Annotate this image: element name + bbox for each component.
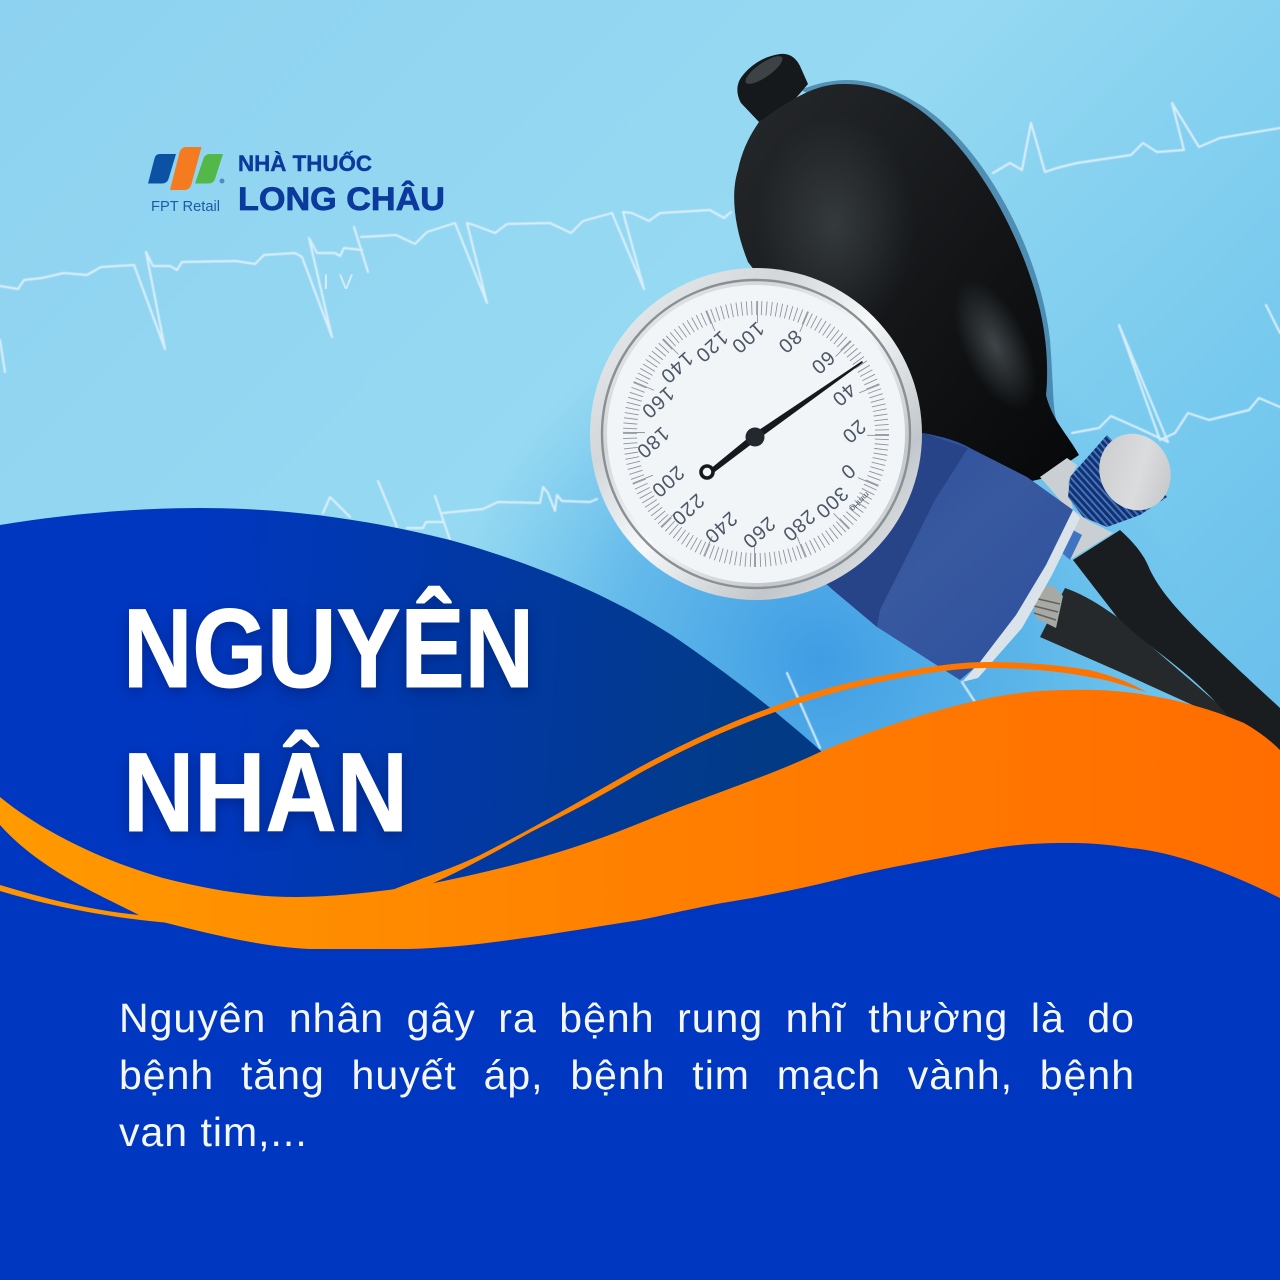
logo mark green bbox=[195, 154, 223, 184]
logo FPT Retail: FPT Retail bbox=[151, 199, 220, 215]
connector shadow side bbox=[800, 433, 968, 627]
bulb cap highlight bbox=[742, 52, 786, 88]
background shade bbox=[300, 240, 1280, 1030]
metal clamp bbox=[1040, 458, 1113, 560]
gauge bbox=[590, 268, 922, 600]
bulb valve cap bbox=[737, 54, 808, 122]
dial numbers: 160 bbox=[636, 382, 678, 423]
dial numbers: 240 bbox=[699, 507, 741, 548]
body text: Nguyên nhân gây ra bệnh rung nhĩ thường là do bbox=[119, 995, 1135, 1041]
pressure bulb bbox=[734, 52, 1079, 500]
logo LONG CHÂU: LONG CHÂU bbox=[238, 181, 445, 217]
gauge face bbox=[607, 285, 905, 583]
knob bbox=[1068, 422, 1183, 527]
orange thin arc bbox=[392, 662, 1146, 890]
upper tube bbox=[1073, 530, 1280, 752]
cuff connector bbox=[800, 433, 1080, 682]
major ticks bbox=[634, 312, 878, 556]
dial numbers: 140 bbox=[655, 347, 697, 388]
logo bbox=[148, 147, 445, 217]
bulb rim reflection bbox=[800, 80, 1058, 425]
logo NHÀ THUỐC: NHÀ THUỐC bbox=[238, 150, 372, 176]
logo mark blue bbox=[148, 154, 176, 184]
orange wave bbox=[0, 690, 1280, 949]
ECG traces bbox=[0, 103, 1280, 748]
title: NHÂN bbox=[123, 730, 408, 855]
knob top disc bbox=[1087, 422, 1183, 522]
body text: van tim,... bbox=[119, 1109, 308, 1155]
bottom blue panel bbox=[0, 830, 1280, 1280]
dial numbers bbox=[631, 317, 871, 553]
dial numbers: 100 bbox=[726, 317, 768, 358]
metal thread bbox=[1030, 585, 1063, 628]
dial numbers: 280 bbox=[777, 505, 819, 546]
orange thin left stripe bbox=[0, 885, 170, 923]
knurled body bbox=[1068, 435, 1167, 527]
dial numbers: 300 bbox=[810, 482, 852, 523]
gauge outer bezel bbox=[590, 268, 922, 600]
bulb body bbox=[734, 84, 1079, 500]
dial numbers: 180 bbox=[631, 422, 673, 463]
logo registered mark bbox=[220, 178, 224, 184]
chrome plate bbox=[962, 510, 1080, 682]
title: NGUYÊN bbox=[123, 586, 534, 711]
dark blue hill bbox=[0, 508, 900, 1000]
body text: bệnh tăng huyết áp, bệnh tim mạch vành, bệnh bbox=[119, 1052, 1135, 1098]
body text bbox=[119, 995, 1135, 1155]
dial numbers: 20 bbox=[837, 415, 870, 448]
title bbox=[123, 586, 534, 855]
needle tail ring bbox=[701, 466, 713, 478]
dial numbers: 60 bbox=[806, 346, 839, 379]
ECG lead label: I V bbox=[323, 271, 353, 294]
bulb highlights bbox=[755, 115, 1054, 422]
bezel dark line bbox=[602, 280, 910, 588]
needle hub bbox=[746, 428, 764, 446]
dial numbers: 260 bbox=[737, 512, 779, 553]
minor ticks bbox=[630, 308, 882, 560]
lower tube bbox=[1040, 588, 1232, 722]
logo mark orange bbox=[170, 147, 202, 190]
needle bbox=[709, 361, 863, 474]
dial numbers: mmHg bbox=[848, 490, 871, 513]
dial numbers: 40 bbox=[827, 378, 860, 411]
dial numbers: 0 bbox=[835, 459, 859, 483]
dial numbers: 220 bbox=[666, 489, 708, 530]
dial numbers: 80 bbox=[773, 325, 806, 358]
dial numbers: 200 bbox=[646, 461, 688, 502]
dial numbers: 120 bbox=[690, 326, 732, 367]
connector body bbox=[800, 433, 1073, 680]
